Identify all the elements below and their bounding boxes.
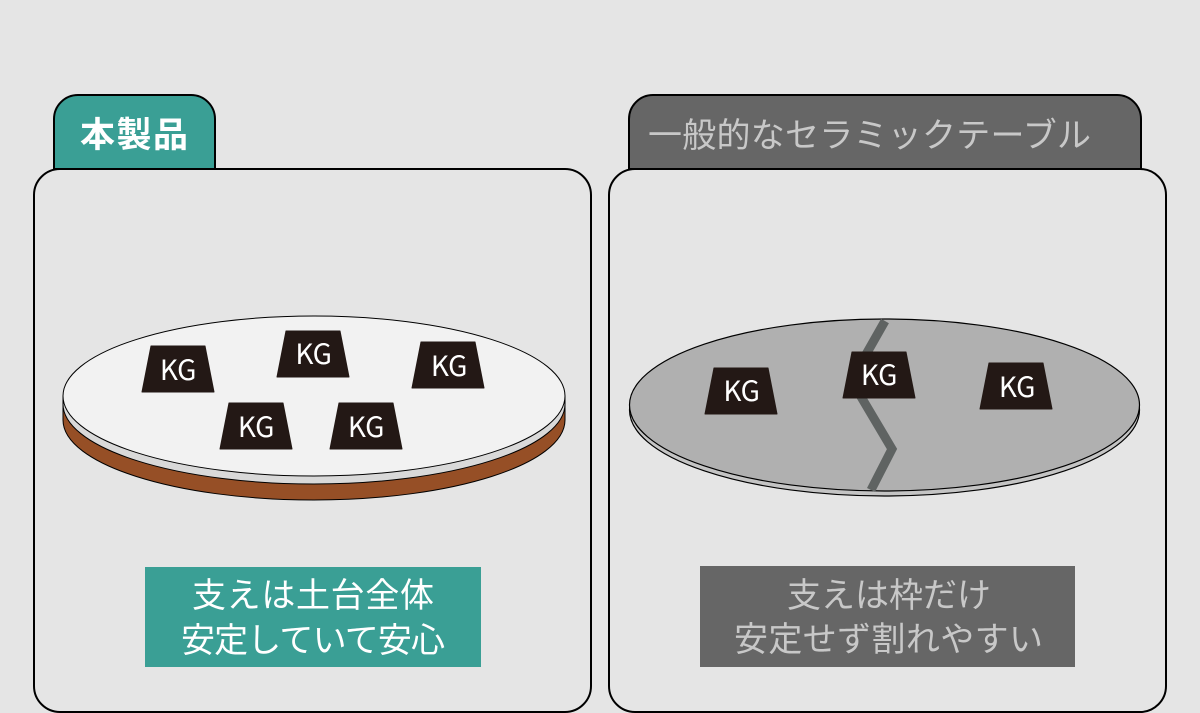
caption: this product	[145, 567, 481, 667]
caption: this product: 安定していて安心	[181, 613, 445, 662]
caption: ordinary ceramic table	[700, 566, 1075, 667]
caption: ordinary ceramic table: 支えは枠だけ	[787, 568, 991, 617]
panel: this product	[34, 169, 591, 712]
weight 1	[142, 346, 214, 392]
weight 4: KG	[238, 406, 274, 446]
weight 3	[980, 363, 1052, 409]
weight 4	[220, 403, 292, 449]
caption: this product: 支えは土台全体	[192, 568, 434, 617]
crack	[860, 321, 892, 490]
caption: ordinary ceramic table: 安定せず割れやすい	[734, 612, 1043, 661]
panel: ordinary ceramic table	[609, 169, 1166, 712]
tab heading: this product: 本製品	[80, 107, 188, 158]
weight 5	[330, 403, 402, 449]
weight 3: KG	[431, 345, 467, 385]
table: wooden base with white top	[63, 316, 565, 500]
tab heading: ordinary ceramic table: 一般的なセラミックテーブル	[648, 108, 1091, 157]
weight 3	[412, 342, 484, 388]
tab: this product	[54, 95, 215, 169]
tab: ordinary ceramic table	[629, 95, 1141, 169]
weight 1: KG	[723, 370, 760, 410]
weight 3: KG	[999, 366, 1035, 406]
weight 1	[705, 368, 777, 414]
weight 5: KG	[348, 406, 384, 446]
weight 2: KG	[861, 354, 897, 394]
weight 2: KG	[295, 333, 332, 373]
table: grey ceramic top	[630, 319, 1140, 496]
weight 2	[843, 352, 915, 398]
weight 1: KG	[160, 349, 196, 389]
weight 2	[277, 331, 349, 377]
